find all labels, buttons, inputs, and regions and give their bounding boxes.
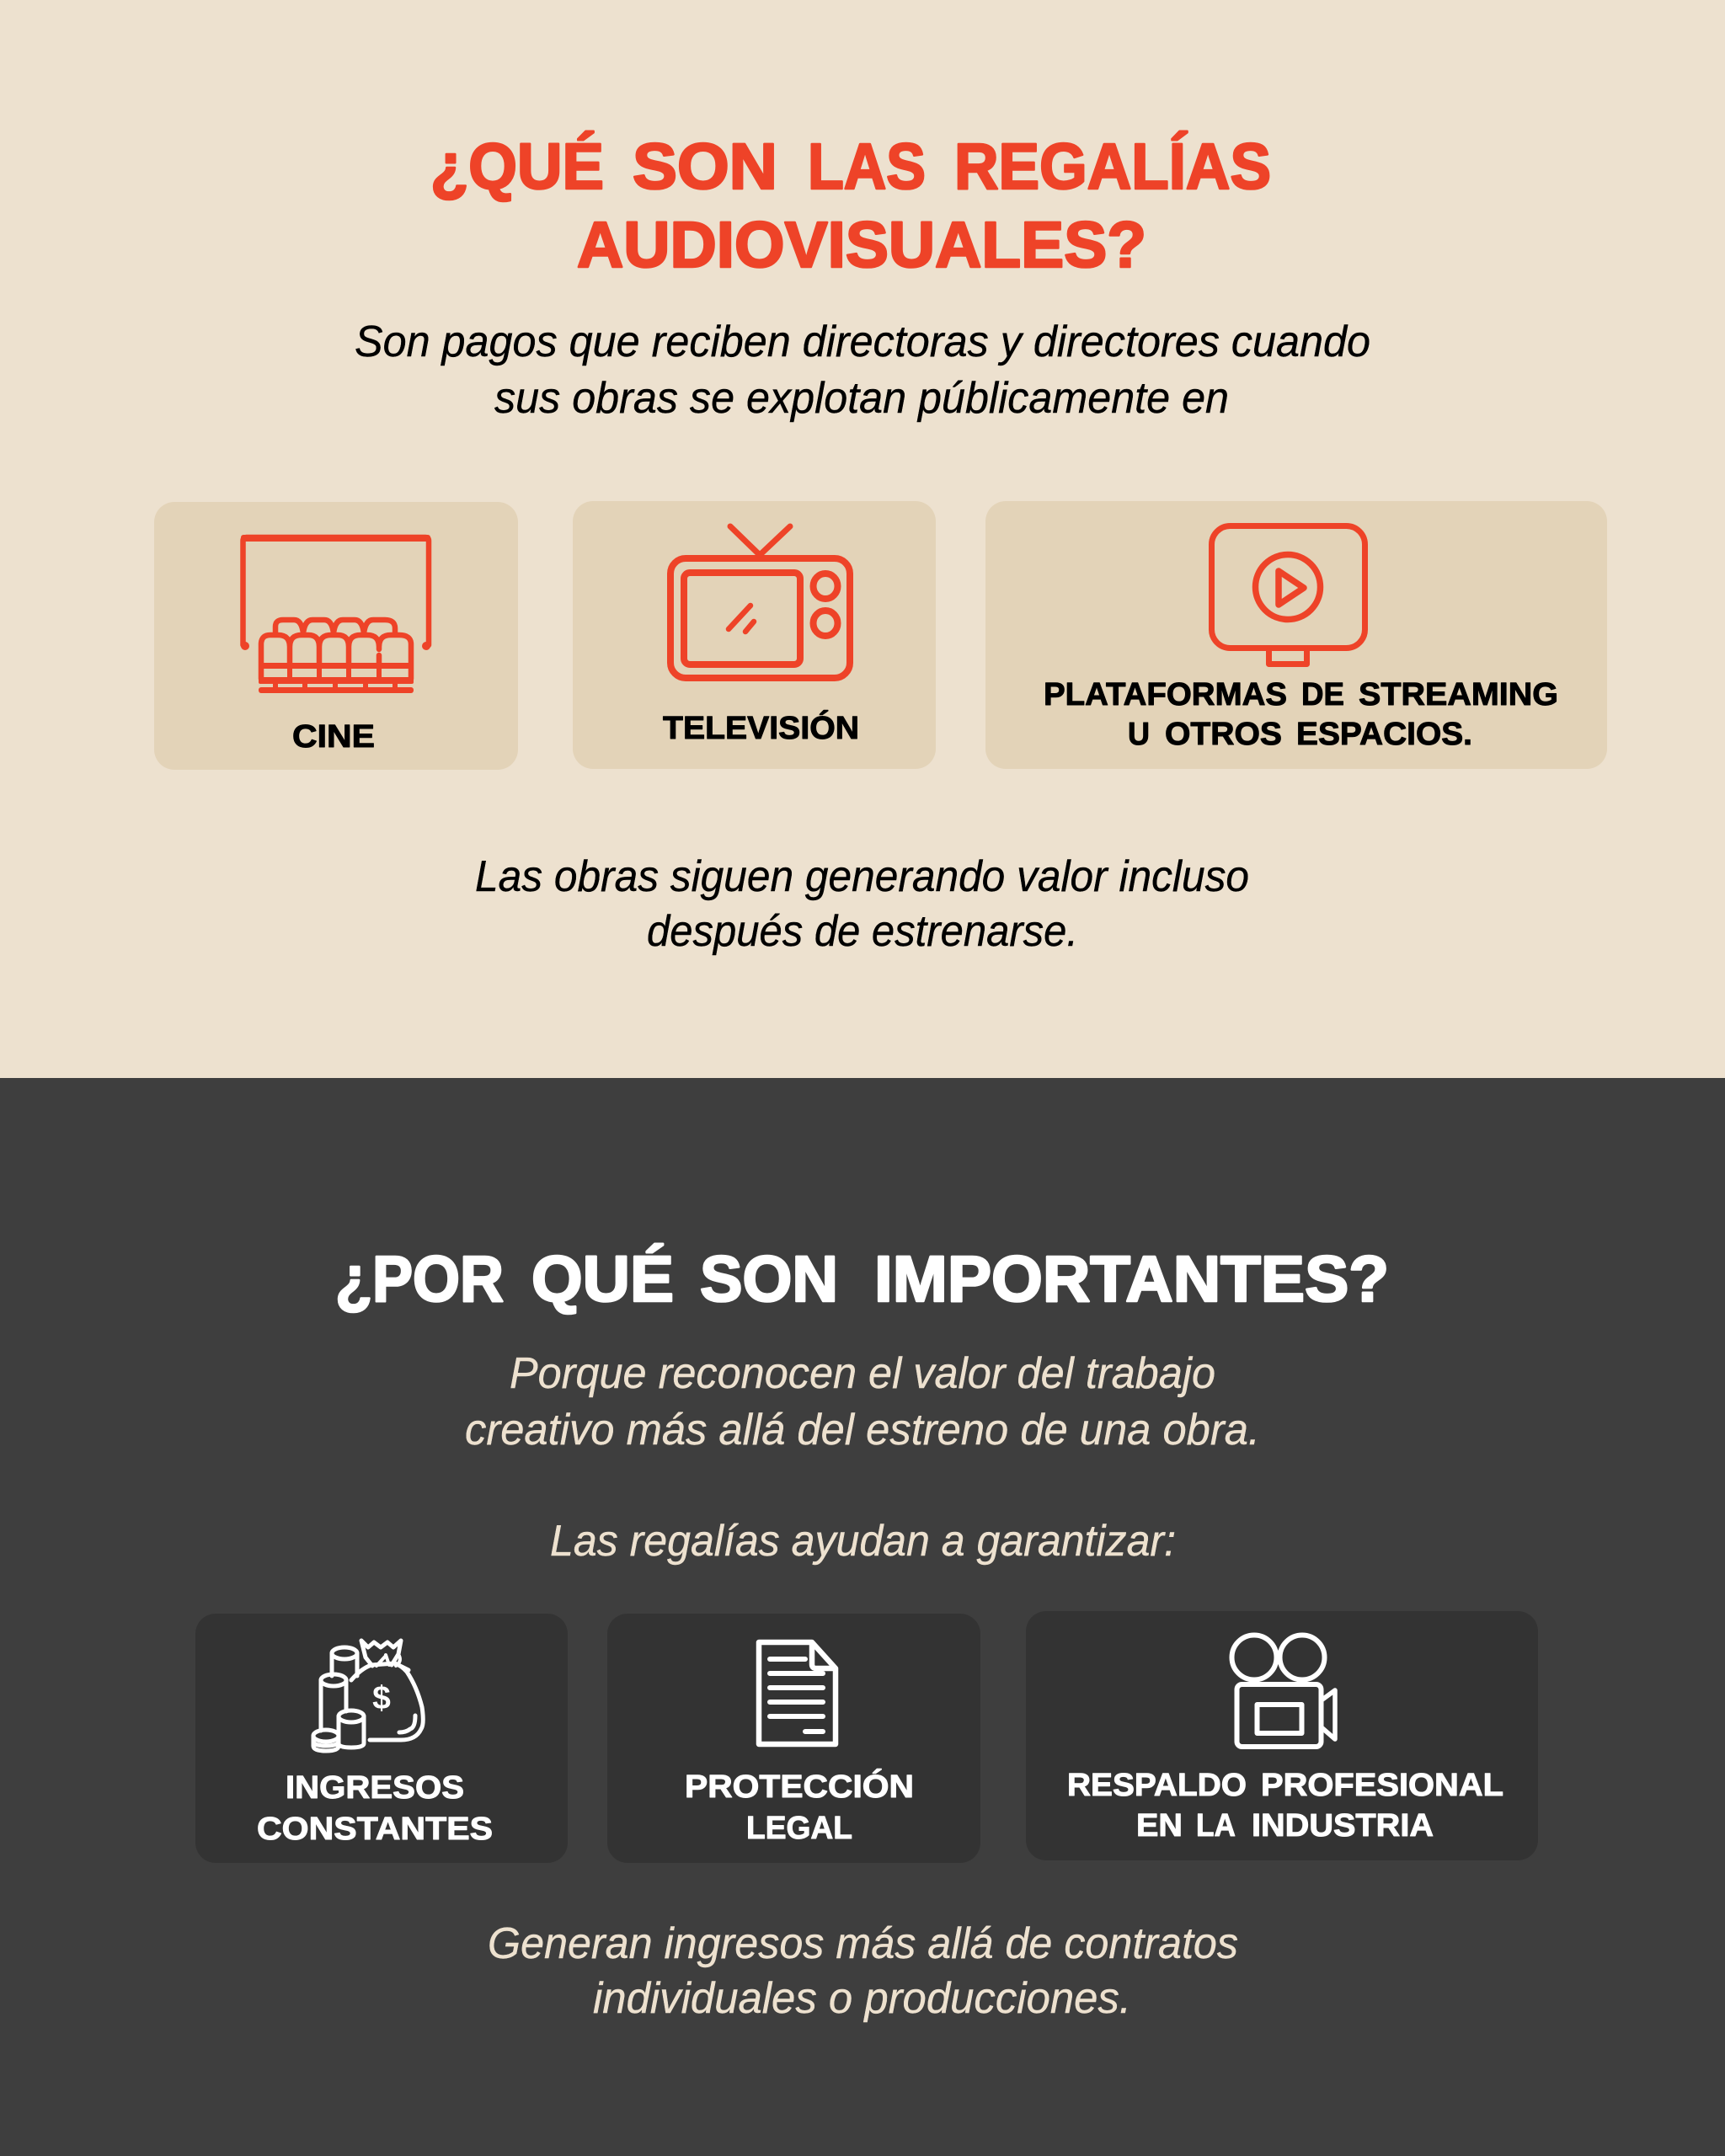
card: cine — [154, 502, 518, 770]
text block: ingresos más allá de contratos — [488, 1919, 1238, 2023]
label: respaldo profesional: INDUSTRIA — [1252, 1808, 1434, 1844]
title: por qué son importantes: ¿POR — [335, 1243, 504, 1315]
card: protección legal — [607, 1614, 980, 1863]
text block: definición — [355, 318, 1370, 423]
title: qué son las regalías audiovisuales: AUDIOVISUALES? — [577, 209, 1146, 281]
text block: valor posterior al estreno — [475, 852, 1249, 956]
title: qué son las regalías audiovisuales: REGALÍAS — [954, 131, 1271, 203]
text block: reconocimiento del trabajo creativo — [465, 1349, 1260, 1454]
text block: ingresos más allá de contratos: individuales o producciones. — [593, 1974, 1131, 2023]
text block: introducción de la lista: Las regalías ayudan a garantizar: — [550, 1517, 1176, 1566]
label: protección legal: PROTECCIÓN — [685, 1768, 914, 1805]
label: ingresos constantes — [257, 1770, 493, 1847]
icon: cámara de cine — [1231, 1636, 1335, 1747]
label: protección legal: LEGAL — [746, 1811, 852, 1846]
text block: definición: sus obras se explotan públicamente en — [494, 374, 1229, 423]
title: qué son las regalías audiovisuales: LAS — [808, 131, 926, 203]
title: por qué son importantes: IMPORTANTES? — [874, 1243, 1389, 1315]
card: plataformas de streaming — [985, 501, 1607, 769]
label: plataformas de streaming — [1044, 677, 1558, 752]
text block: ingresos más allá de contratos: Generan ingresos más allá de contratos — [488, 1919, 1238, 1968]
text block: valor posterior al estreno: Las obras siguen generando valor incluso — [475, 852, 1249, 901]
text block: definición: Son pagos que reciben directoras y directores cuando — [355, 318, 1370, 366]
text block: reconocimiento del trabajo creativo: Porque reconocen el valor del trabajo — [510, 1349, 1215, 1398]
card: respaldo profesional — [1026, 1611, 1538, 1860]
panel: qué son las regalías — [0, 0, 1725, 1078]
label: ingresos constantes: CONSTANTES — [257, 1812, 493, 1847]
title: por qué son importantes: QUÉ — [531, 1243, 674, 1315]
label: respaldo profesional: LA — [1196, 1808, 1236, 1844]
title: por qué son importantes: SON — [700, 1243, 838, 1315]
icon: bolsa de dinero y monedas — [313, 1641, 423, 1751]
card: ingresos constantes — [195, 1614, 568, 1863]
label: plataformas de streaming: ESPACIOS. — [1296, 717, 1472, 752]
label: televisión: TELEVISIÓN — [663, 709, 859, 746]
label: plataformas de streaming: STREAMING — [1359, 677, 1558, 712]
card: televisión — [573, 501, 936, 769]
text block: valor posterior al estreno: después de estrenarse. — [647, 907, 1078, 956]
label: plataformas de streaming: U — [1128, 717, 1150, 752]
icon: bolsa de dinero y monedas: $ — [372, 1680, 391, 1716]
icon: televisor — [670, 526, 850, 678]
label: respaldo profesional: EN — [1136, 1808, 1183, 1844]
label: respaldo profesional: RESPALDO — [1067, 1768, 1247, 1803]
icon: sala de cine — [241, 535, 430, 693]
label: respaldo profesional — [1067, 1768, 1503, 1844]
label: cine: CINE — [292, 719, 375, 755]
label: plataformas de streaming: PLATAFORMAS — [1044, 677, 1287, 712]
icon: documento — [759, 1642, 836, 1744]
icon: pantalla con botón de reproducción — [1211, 526, 1365, 664]
label: plataformas de streaming: OTROS — [1165, 717, 1282, 752]
title: qué son las regalías audiovisuales — [430, 131, 1271, 281]
label: protección legal — [685, 1768, 914, 1846]
text block: reconocimiento del trabajo creativo: creativo más allá del estreno de una obra. — [465, 1406, 1260, 1454]
title: por qué son importantes — [335, 1243, 1389, 1315]
label: ingresos constantes: INGRESOS — [286, 1770, 464, 1806]
title: qué son las regalías audiovisuales: SON — [633, 131, 777, 203]
label: plataformas de streaming: DE — [1301, 677, 1344, 712]
label: respaldo profesional: PROFESIONAL — [1261, 1768, 1503, 1803]
panel: por qué son importantes — [0, 1078, 1725, 2156]
title: qué son las regalías audiovisuales: ¿QUÉ — [430, 131, 604, 203]
